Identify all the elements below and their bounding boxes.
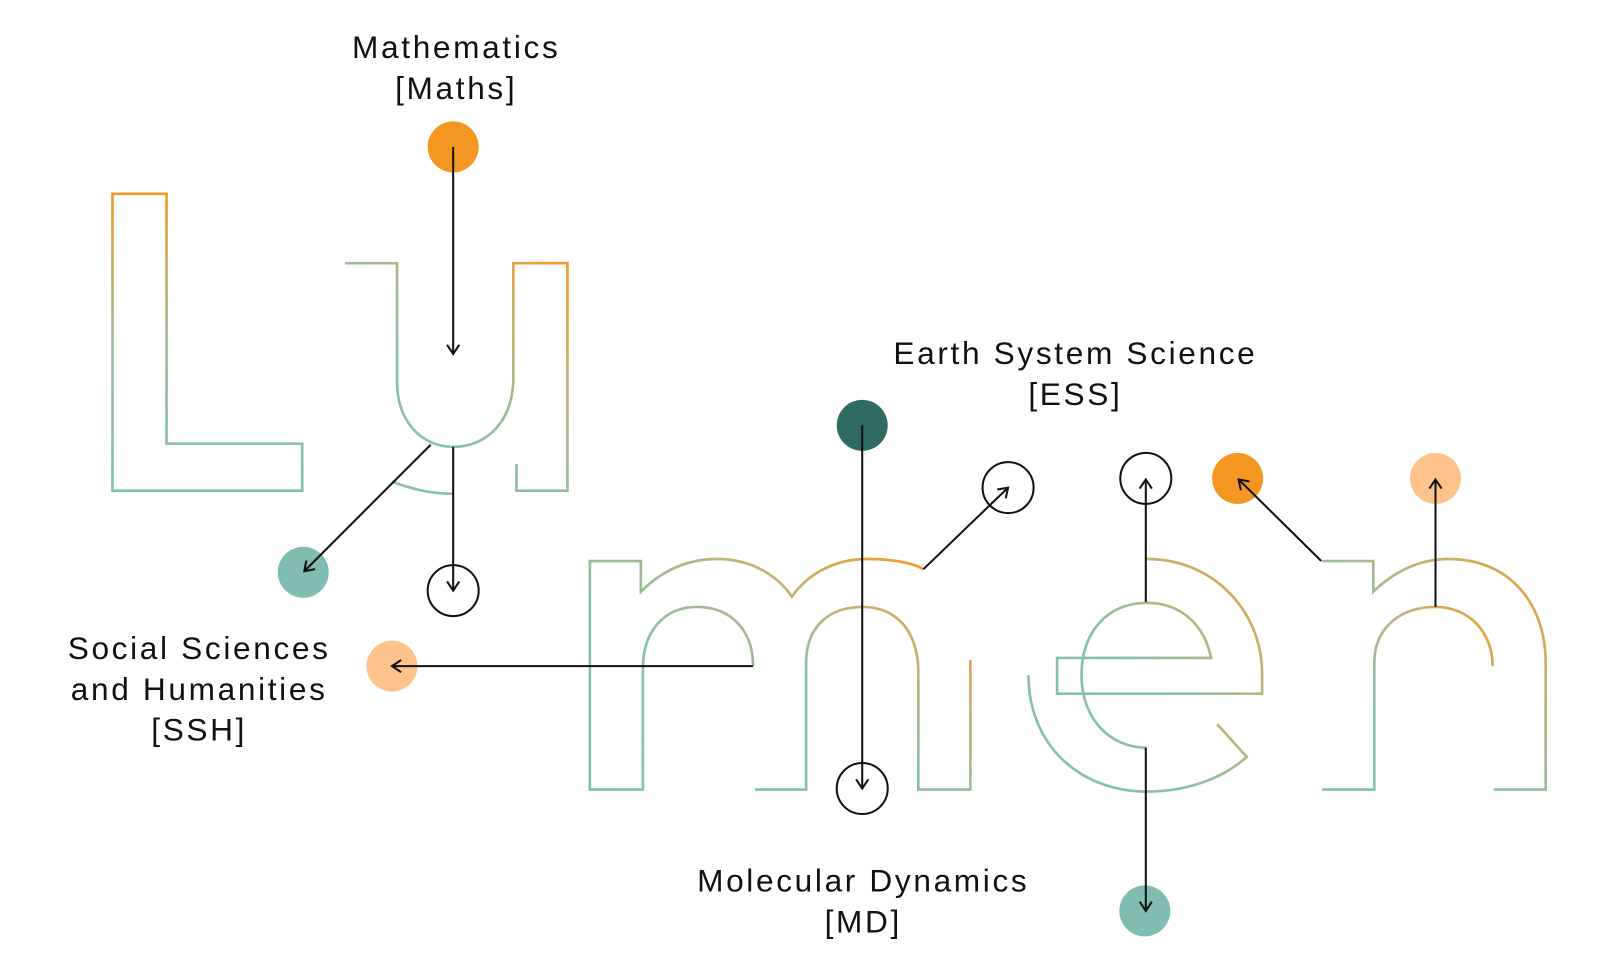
arrow: MD [837,400,888,814]
arrow: SSH [366,641,753,692]
arrow: e up [1120,453,1171,602]
arrow: n to orange dot [1212,453,1321,561]
arrow: n to peach dot [1410,453,1461,607]
arrow: m to open circle [923,462,1034,569]
label: MD [697,863,1029,939]
label: SSH [68,630,331,748]
dot: Maths [428,121,479,172]
letter L [112,194,302,491]
label: Mathematics: [Maths] [395,70,517,106]
label: SSH: Social Sciences [68,630,331,666]
letter e [1028,559,1262,792]
label: Mathematics [352,29,560,106]
label: SSH: and Humanities [71,671,328,707]
arrow: u to teal dot [278,445,431,598]
letter u [345,263,567,494]
label: MD: Molecular Dynamics [697,863,1029,899]
label: ESS: Earth System Science [893,335,1257,371]
label: ESS: [ESS] [1028,376,1122,412]
label: ESS [893,335,1257,412]
arrow: maths down [452,147,454,354]
arrow: u to open circle [428,447,479,616]
letter n [1322,559,1546,790]
label: SSH: [SSH] [151,712,247,748]
label: MD: [MD] [825,903,902,939]
arrow: e down to teal dot [1119,748,1170,936]
label: Mathematics: Mathematics [352,29,560,65]
letter m [590,559,970,790]
